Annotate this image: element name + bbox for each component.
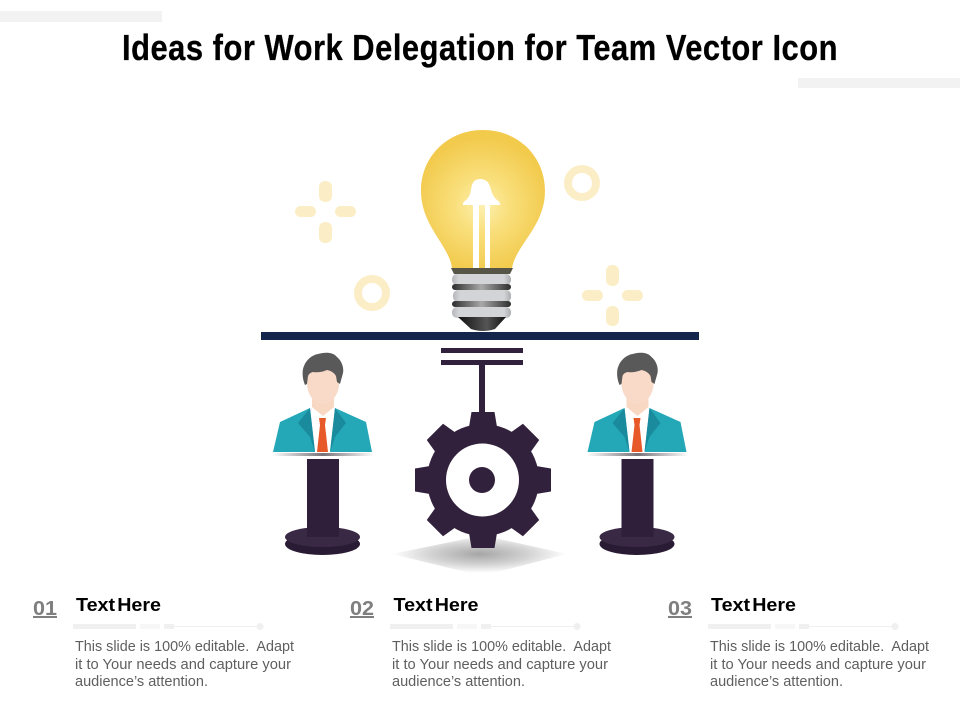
title: Ideas for Work Delegation for Team Vector Icon — [122, 27, 838, 68]
tie — [632, 418, 642, 452]
icon: ring left — [358, 279, 386, 307]
body text: audience’s attention. — [75, 673, 208, 690]
number: 02 — [350, 598, 374, 620]
body text — [392, 638, 612, 690]
top left decorative bar — [0, 11, 162, 22]
bulb collar — [451, 268, 513, 274]
text block 02 — [350, 595, 612, 690]
heading: Text Here — [711, 595, 796, 615]
hair — [617, 353, 658, 385]
connector — [441, 348, 523, 415]
face — [622, 370, 654, 404]
icon: plus sparkle right — [582, 265, 643, 326]
pedestal column — [307, 459, 339, 537]
pedestal column — [622, 459, 654, 537]
divider — [390, 623, 580, 630]
text block 01 — [33, 595, 295, 690]
icon: plus sparkle left — [295, 181, 356, 243]
shirt — [310, 408, 335, 452]
horizontal beam — [261, 332, 699, 340]
body text — [75, 638, 295, 690]
top right decorative bar — [798, 78, 960, 88]
neck — [312, 392, 334, 416]
body text: it to Your needs and capture your — [75, 656, 291, 673]
filament — [463, 179, 500, 268]
body text: This slide is 100% editable. Adapt — [75, 638, 295, 655]
figure: right person on pedestal — [586, 353, 688, 555]
desk shadow — [586, 453, 688, 456]
icon: gear — [415, 412, 551, 548]
face — [307, 370, 339, 404]
bulb glass — [421, 130, 545, 268]
jacket — [588, 408, 686, 452]
jacket — [273, 408, 372, 452]
heading: Text Here — [76, 595, 161, 615]
body text — [710, 638, 930, 690]
pedestal base — [600, 533, 674, 555]
lapels — [298, 408, 346, 452]
body text: This slide is 100% editable. Adapt — [710, 638, 930, 655]
divider — [73, 623, 264, 630]
divider — [708, 623, 898, 630]
number: 01 — [33, 598, 57, 620]
tie — [317, 418, 328, 452]
desk shadow — [272, 453, 374, 456]
body text: it to Your needs and capture your — [710, 656, 926, 673]
screw base — [452, 274, 511, 331]
heading: Text Here — [394, 595, 478, 615]
lapels — [612, 408, 660, 452]
figure: left person on pedestal — [272, 353, 374, 555]
shirt — [624, 408, 650, 452]
icon: ring right — [568, 169, 596, 197]
body text: it to Your needs and capture your — [392, 656, 608, 673]
number: 03 — [668, 598, 692, 620]
pedestal base — [285, 533, 360, 555]
neck — [626, 392, 648, 416]
text block 03 — [668, 595, 930, 690]
body text: audience’s attention. — [710, 673, 843, 690]
body text: audience’s attention. — [392, 673, 525, 690]
gear shadow — [392, 538, 567, 576]
body text: This slide is 100% editable. Adapt — [392, 638, 612, 655]
icon: light bulb — [421, 130, 545, 331]
hair — [303, 353, 343, 385]
